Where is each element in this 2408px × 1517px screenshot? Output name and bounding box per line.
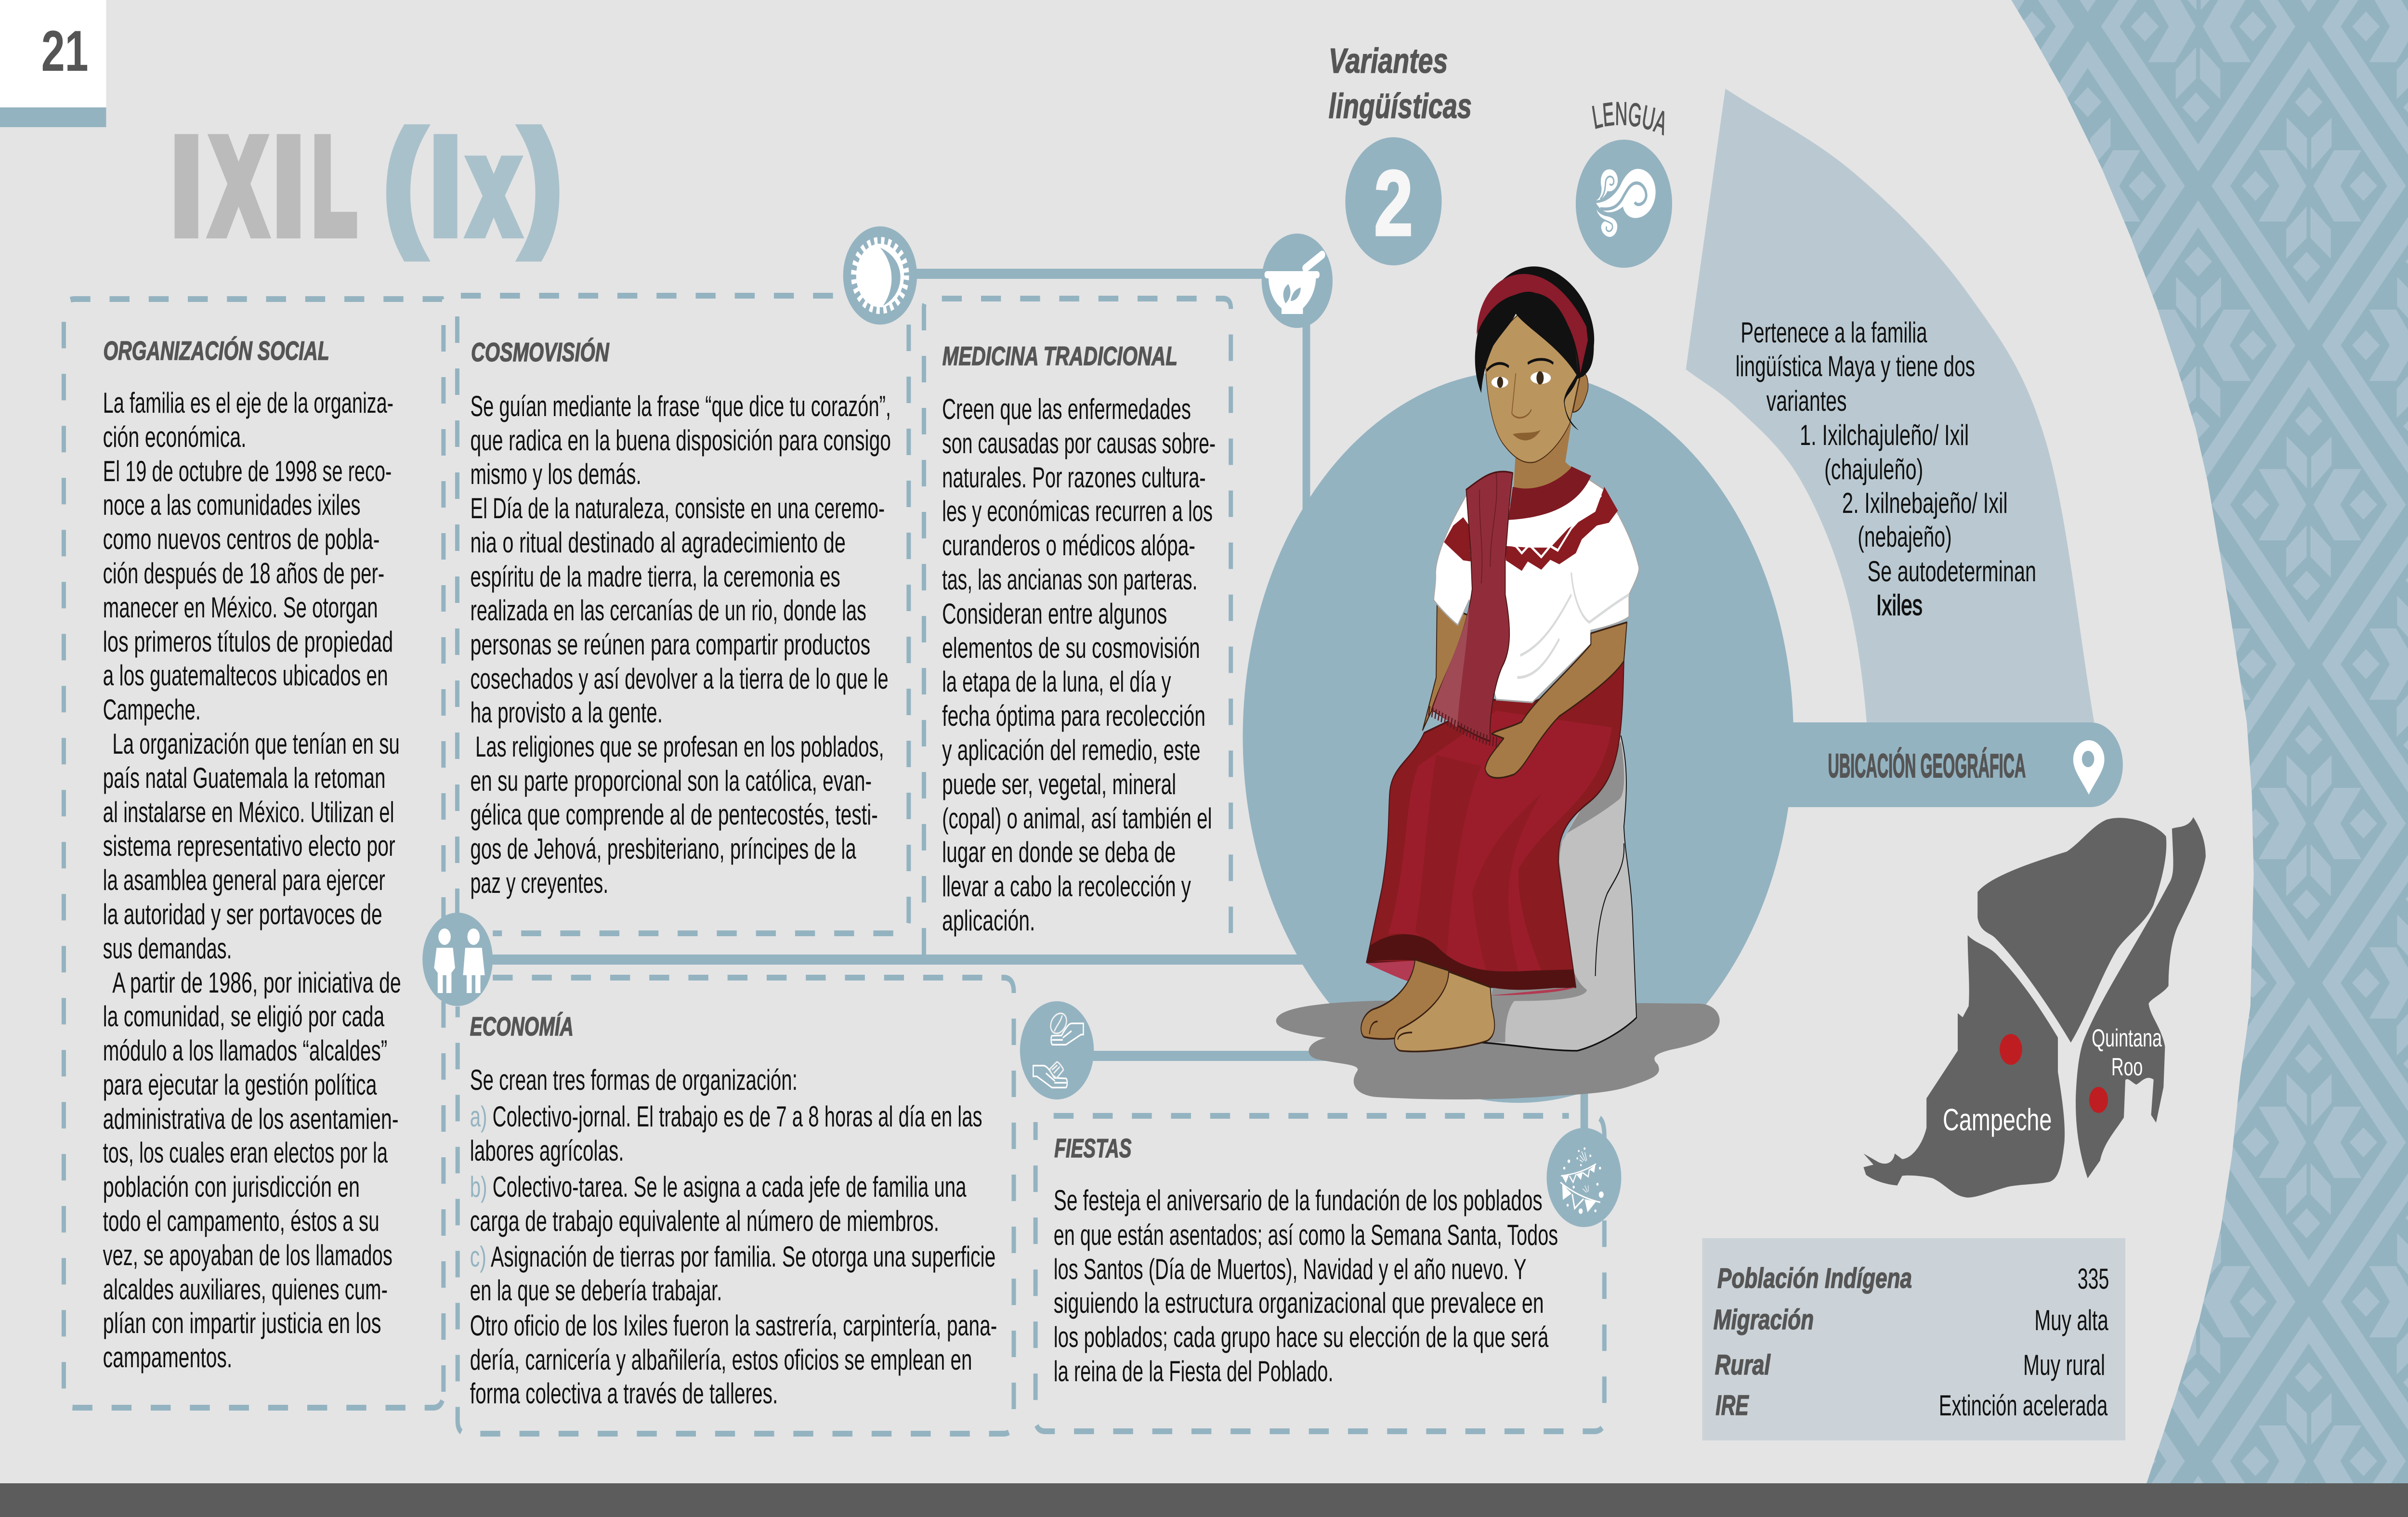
body: lugar en donde se deba de <box>942 837 1176 869</box>
stat labels: IRE <box>1715 1390 1749 1421</box>
title: X <box>211 111 265 262</box>
text: lengua description: Ixiles <box>1876 589 1923 622</box>
body: la autoridad y ser portavoces de <box>103 899 382 931</box>
body: nia o ritual destinado al agradecimiento de <box>471 527 846 559</box>
body <box>470 1064 997 1410</box>
body: forma colectiva a través de talleres. <box>470 1378 778 1410</box>
left eye <box>1492 377 1508 388</box>
stat labels: Rural <box>1715 1349 1771 1380</box>
title: I <box>275 111 303 262</box>
ground shadow <box>1276 1001 1720 1099</box>
body <box>103 387 401 1374</box>
body: realizada en las cercanías de un rio, donde las <box>471 595 866 627</box>
body: sus demandas. <box>103 933 232 965</box>
body: alcaldes auxiliares, quienes cum- <box>103 1274 388 1306</box>
body: los poblados; cada grupo hace su elección de la que será <box>1054 1321 1549 1354</box>
map region: quintana roo <box>2076 817 2206 1178</box>
bottom bar <box>0 1483 2408 1517</box>
icon: fiesta bunting <box>1546 1128 1621 1227</box>
heading: variantes lingüísticas <box>1329 41 1472 126</box>
heading: FIESTAS <box>1054 1134 1132 1163</box>
text: lengua description: Se autodeterminan <box>1868 556 2036 588</box>
text: lengua description: Pertenece a la familia <box>1741 317 1927 349</box>
body: población con jurisdicción en <box>103 1171 360 1203</box>
dashed box: organización social <box>64 299 444 1408</box>
body: gos de Jehová, presbiteriano, príncipes de la <box>471 833 856 865</box>
heading: variantes lingüísticas: Variantes <box>1329 41 1448 80</box>
text: medicina tradicional <box>942 341 1216 937</box>
dashed box: economía <box>458 978 1014 1434</box>
connector lines <box>485 269 1588 1137</box>
body: llevar a cabo la recolección y <box>942 871 1191 903</box>
map region: yucatán <box>1977 818 2166 1043</box>
icon: lengua swirl <box>1576 140 1672 268</box>
body: espíritu de la madre tierra, la ceremonia es <box>471 561 840 593</box>
body: siguiendo la estructura organizacional que prevalece en <box>1054 1287 1544 1320</box>
body: a) Colectivo-jornal. El trabajo es de 7 a 8 horas al día en las <box>470 1101 982 1133</box>
body: Otro oficio de los Ixiles fueron la sastrería, carpintería, pana- <box>470 1310 997 1342</box>
body: labores agrícolas. <box>470 1135 624 1167</box>
stat values: Muy alta <box>2034 1305 2108 1337</box>
body: (copal) o animal, así también el <box>942 803 1212 835</box>
body: La familia es el eje de la organiza- <box>103 387 393 419</box>
body: que radica en la buena disposición para consigo <box>471 425 891 457</box>
body: país natal Guatemala la retoman <box>103 762 385 795</box>
body: carga de trabajo equivalente al número de miembros. <box>470 1205 939 1238</box>
map labels: Roo <box>2111 1053 2143 1081</box>
icon: mortar <box>1262 234 1333 328</box>
textile pattern background <box>1957 0 2408 1488</box>
heading: ECONOMÍA <box>470 1012 574 1041</box>
body: El 19 de octubre de 1998 se reco- <box>103 456 392 488</box>
body: ción económica. <box>103 421 247 454</box>
panel: lengua fan <box>1686 89 2094 722</box>
stat values: 335 <box>2078 1263 2109 1295</box>
title <box>172 106 560 262</box>
map labels: Campeche <box>1943 1103 2052 1138</box>
body: curanderos o médicos alópa- <box>942 530 1195 562</box>
shawl <box>1428 471 1513 743</box>
icon: location pin <box>2073 740 2105 795</box>
body <box>471 391 891 900</box>
text: organización social <box>103 336 401 1374</box>
dashed box: cosmovisión <box>457 296 909 933</box>
hair back <box>1475 266 1594 431</box>
body: campamentos. <box>103 1342 232 1374</box>
left arm <box>1423 603 1472 730</box>
dashed box: fiestas <box>1035 1116 1604 1431</box>
body: en su parte proporcional son la católica, evan- <box>471 765 872 798</box>
body <box>1054 1185 1558 1388</box>
text: fiestas <box>1054 1134 1558 1388</box>
text: lengua description: 2. Ixilnebajeño/ Ixil <box>1842 487 2008 520</box>
central circle <box>1243 371 1793 1103</box>
body: ha provisto a la gente. <box>471 697 663 729</box>
body: en la que se debería trabajar. <box>470 1275 722 1307</box>
body: la etapa de la luna, el día y <box>942 666 1171 698</box>
body: elementos de su cosmovisión <box>942 632 1200 665</box>
body: administrativa de los asentamien- <box>103 1103 399 1136</box>
text: lengua description: 1. Ixilchajuleño/ Ixil <box>1800 419 1969 452</box>
hair front <box>1475 292 1577 393</box>
body: personas se reúnen para compartir productos <box>471 629 870 661</box>
body <box>942 393 1216 937</box>
text: economía <box>470 1012 997 1410</box>
body: naturales. Por razones cultura- <box>942 462 1206 494</box>
body: la reina de la Fiesta del Poblado. <box>1054 1356 1334 1388</box>
body: cosechados y así devolver a la tierra de lo que le <box>471 663 889 695</box>
title: I <box>172 111 201 262</box>
pill label: UBICACIÓN GEOGRÁFICA <box>1828 747 2026 785</box>
body: para ejecutar la gestión política <box>103 1069 377 1101</box>
text: cosmovisión <box>471 338 891 900</box>
head <box>1475 266 1594 463</box>
headband <box>1477 274 1588 374</box>
body: El Día de la naturaleza, consiste en una ceremo- <box>471 493 885 525</box>
body: Las religiones que se profesan en los poblados, <box>475 731 884 763</box>
body: y aplicación del remedio, este <box>942 734 1200 767</box>
text: lengua description <box>1736 317 2036 622</box>
body: la comunidad, se eligió por cada <box>103 1001 385 1033</box>
body: noce a las comunidades ixiles <box>103 489 361 522</box>
body: Se guían mediante la frase “que dice tu corazón”, <box>471 391 891 423</box>
stat values: Extinción acelerada <box>1939 1390 2108 1422</box>
map marker quintana roo <box>2089 1087 2108 1113</box>
icon: sun and moon <box>843 226 917 325</box>
body: sistema representativo electo por <box>103 830 395 863</box>
stat values: Muy rural <box>2023 1349 2105 1382</box>
body: los Santos (Día de Muertos), Navidad y el año nuevo. Y <box>1054 1254 1527 1286</box>
body: La organización que tenían en su <box>112 728 400 760</box>
body: manecer en México. Se otorgan <box>103 592 378 624</box>
title: x <box>470 111 518 262</box>
text: lengua description: variantes <box>1767 385 1847 418</box>
body: son causadas por causas sobre- <box>942 428 1216 460</box>
text: lengua description: lingüística Maya y tiene dos <box>1736 351 1975 383</box>
nose <box>1512 374 1531 418</box>
body: mismo y los demás. <box>471 458 641 491</box>
heading: variantes lingüísticas: lingüísticas <box>1329 86 1472 126</box>
body: fecha óptima para recolección <box>942 700 1205 732</box>
eyebrows <box>1487 359 1553 371</box>
body: vez, se apoyaban de los llamados <box>103 1240 393 1272</box>
right eye <box>1531 371 1551 384</box>
icon: hands <box>1020 1001 1094 1099</box>
body: puede ser, vegetal, mineral <box>942 769 1176 801</box>
body: al instalarse en México. Utilizan el <box>103 797 394 829</box>
body: b) Colectivo-tarea. Se le asigna a cada jefe de familia una <box>470 1171 967 1203</box>
dashed box: medicina tradicional <box>924 299 1231 955</box>
pill: ubicación geográfica <box>1739 722 2123 807</box>
stool <box>1481 735 1636 1051</box>
body: Se festeja el aniversario de la fundación de los poblados <box>1054 1185 1543 1217</box>
body: Se crean tres formas de organización: <box>470 1064 798 1097</box>
heading: lengua: LENGUA <box>1592 102 1664 136</box>
heading: lengua <box>1592 102 1664 136</box>
heading: MEDICINA TRADICIONAL <box>942 341 1178 371</box>
stat values <box>1939 1263 2109 1422</box>
text: lengua description: (chajuleño) <box>1824 454 1923 486</box>
map region: campeche <box>1863 935 2065 1198</box>
map labels <box>1943 1024 2162 1138</box>
body: gélica que comprende al de pentecostés, testi- <box>471 799 878 831</box>
body: ción después de 18 años de per- <box>103 558 384 590</box>
panel: statistics <box>1702 1238 2125 1440</box>
body: a los guatemaltecos ubicados en <box>103 660 388 692</box>
title: I <box>431 111 460 262</box>
body: tas, las ancianas son parteras. <box>942 564 1197 596</box>
right arm and hand <box>1485 622 1627 778</box>
title: L <box>313 111 356 262</box>
body: A partir de 1986, por iniciativa de <box>112 967 401 999</box>
icon: people <box>422 913 493 1006</box>
body: c) Asignación de tierras por familia. Se otorga una superficie <box>470 1241 995 1273</box>
text: lengua description: (nebajeño) <box>1858 521 1952 553</box>
stat labels: Migración <box>1714 1304 1814 1335</box>
title: ( <box>385 106 422 257</box>
stat labels <box>1714 1263 1912 1421</box>
feet <box>1361 959 1494 1051</box>
body: los primeros títulos de propiedad <box>103 626 393 658</box>
icon: variantes count: 2 <box>1374 152 1413 255</box>
map: campeche and quintana roo <box>1863 817 2206 1198</box>
body: Campeche. <box>103 694 201 726</box>
blouse <box>1434 466 1639 703</box>
page number: 21 <box>41 19 89 83</box>
body: Consideran entre algunos <box>942 598 1167 630</box>
map marker campeche <box>2000 1034 2022 1065</box>
page number tab <box>0 0 106 127</box>
skirt <box>1366 661 1624 995</box>
body: todo el campamento, éstos a su <box>103 1205 380 1238</box>
body: en que están asentados; así como la Semana Santa, Todos <box>1054 1219 1558 1252</box>
body: la asamblea general para ejercer <box>103 864 385 897</box>
body: como nuevos centros de pobla- <box>103 523 380 556</box>
body: les y económicas recurren a los <box>942 496 1213 528</box>
map labels: Quintana <box>2092 1024 2162 1052</box>
neck <box>1514 423 1571 488</box>
title: ) <box>524 106 560 257</box>
body: dería, carnicería y albañilería, estos oficios se emplean en <box>470 1344 972 1376</box>
heading: COSMOVISIÓN <box>471 338 609 367</box>
body: Creen que las enfermedades <box>942 393 1191 426</box>
body: aplicación. <box>942 905 1035 937</box>
body: tos, los cuales eran electos por la <box>103 1137 388 1169</box>
body: plían con impartir justicia en los <box>103 1308 381 1340</box>
body: paz y creyentes. <box>471 867 608 900</box>
illustration: seated Ixil woman <box>1361 266 1639 1051</box>
icon: variantes count <box>1345 137 1442 265</box>
heading: ORGANIZACIÓN SOCIAL <box>103 336 329 366</box>
stat labels: Población Indígena <box>1717 1263 1912 1294</box>
body: módulo a los llamados “alcaldes” <box>103 1035 387 1067</box>
mouth <box>1513 430 1541 440</box>
